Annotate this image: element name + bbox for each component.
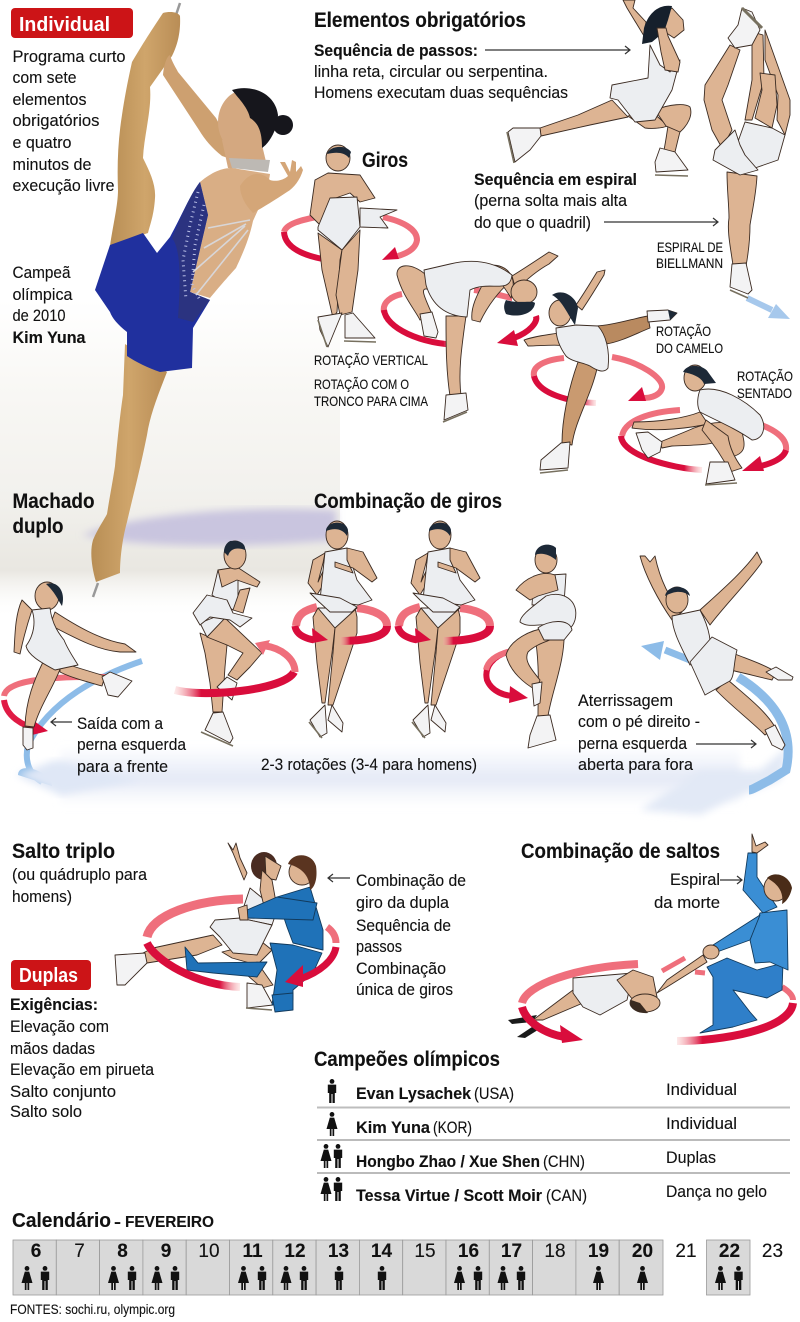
heading: machado duplo xyxy=(12,490,94,538)
calendar: 6 xyxy=(31,1241,41,1262)
figure: sit spin xyxy=(621,365,786,485)
text: combinação de giro da dupla: única de giros xyxy=(356,980,453,999)
label: rotação tronco: TRONCO PARA CIMA xyxy=(314,393,429,409)
arrow: espiral da morte xyxy=(720,876,742,884)
row: Zhao and Shen xyxy=(320,1144,716,1171)
figure: vertical spin xyxy=(284,145,417,347)
text: campeã olímpica: olímpica xyxy=(12,285,73,304)
text: combinação de giro da dupla: giro da dupla xyxy=(356,893,450,912)
calendar: 16 xyxy=(458,1241,479,1262)
calendar: 15 xyxy=(414,1241,436,1262)
calendar xyxy=(13,1240,783,1295)
text: aterrissagem: Aterrissagem xyxy=(578,691,673,710)
text: campeã olímpica xyxy=(12,263,86,347)
row: Kim Yuna: Kim Yuna xyxy=(356,1118,431,1137)
label: rotação sentado xyxy=(737,368,793,401)
label: rotações: 2-3 rotações (3-4 para homens) xyxy=(261,755,477,774)
text: sequência de passos xyxy=(314,41,568,102)
arrow: espiral xyxy=(604,218,718,226)
row: Zhao and Shen: (CHN) xyxy=(543,1152,585,1171)
text: combinação de giro da dupla: Combinação de xyxy=(356,871,466,890)
text: salto triplo: Salto triplo xyxy=(12,840,115,863)
arrow: passos xyxy=(485,46,630,54)
row: Virtue and Moir xyxy=(320,1177,767,1205)
text: aterrissagem: perna esquerda xyxy=(578,734,687,753)
text: espiral da morte: da morte xyxy=(654,893,720,912)
row: Virtue and Moir: Dança no gelo xyxy=(666,1182,767,1201)
photo: Kim Yuna skater xyxy=(91,3,303,597)
figure: axel take-off skater xyxy=(4,582,142,795)
duplas badge xyxy=(11,960,91,990)
text: combinação de giro da dupla: Sequência de xyxy=(356,916,451,935)
text: exigências: Exigências: xyxy=(10,995,98,1014)
calendar: 22 xyxy=(719,1241,740,1262)
ice band at the base of the jumps xyxy=(60,745,740,807)
heading: combinação de giros: Combinação de giros xyxy=(314,490,502,513)
text: programa curto: Programa curto xyxy=(12,47,126,66)
text: exigências: Elevação em pirueta xyxy=(10,1060,154,1079)
label: rotação tronco xyxy=(314,376,429,409)
table: champions xyxy=(317,1079,790,1205)
duplas badge: Duplas xyxy=(19,965,78,987)
text: salto triplo xyxy=(12,840,148,906)
label: rotação tronco: ROTAÇÃO COM O xyxy=(314,376,409,392)
text: exigências: Salto conjunto xyxy=(10,1082,116,1101)
calendar: 9 xyxy=(161,1241,171,1262)
text: saída: perna esquerda xyxy=(77,735,186,754)
row: Evan Lysachek: Evan Lysachek xyxy=(356,1084,472,1103)
label: rotação do camelo xyxy=(656,323,723,356)
figure: step sequence skater xyxy=(507,0,691,176)
heading: giros: Giros xyxy=(362,149,408,172)
heading: campeões olímpicos: Campeões olímpicos xyxy=(314,1048,500,1071)
arrow: combinação xyxy=(328,874,350,882)
text: aterrissagem xyxy=(578,691,700,774)
heading: calendário: - xyxy=(114,1214,121,1231)
text: sequência de passos: Sequência de passos: xyxy=(314,41,478,60)
row: Zhao and Shen: Hongbo Zhao / Xue Shen xyxy=(356,1152,540,1171)
text: campeã olímpica: Kim Yuna xyxy=(12,328,86,347)
text: espiral da morte: Espiral xyxy=(670,870,720,889)
row: Kim Yuna xyxy=(326,1112,737,1137)
label: espiral de Biellmann xyxy=(656,239,723,271)
text: sequência de passos: linha reta, circular ou serpentina. xyxy=(314,62,548,81)
heading: calendário: Calendário xyxy=(12,1210,111,1232)
text: programa curto: execução livre xyxy=(12,176,114,195)
text: aterrissagem: aberta para fora xyxy=(578,755,694,774)
text: exigências: mãos dadas xyxy=(10,1039,95,1058)
row: Evan Lysachek: (USA) xyxy=(474,1084,514,1103)
label: rotação do camelo: DO CAMELO xyxy=(656,340,723,356)
calendar: 13 xyxy=(328,1241,349,1262)
text: campeã olímpica: Campeã xyxy=(12,263,71,282)
label: rotação do camelo: ROTAÇÃO xyxy=(656,323,711,339)
text: salto triplo: homens) xyxy=(12,887,72,906)
heading: sequência em espiral: Sequência em espiral xyxy=(474,170,637,189)
figure: Biellmann spiral xyxy=(704,8,790,319)
text: espiral da morte xyxy=(654,870,720,912)
calendar: 23 xyxy=(762,1241,783,1262)
heading: sequência em espiral xyxy=(474,170,637,232)
heading: calendário xyxy=(12,1210,214,1232)
heading: calendário: FEVEREIRO xyxy=(125,1214,214,1231)
figure: axel landing skater xyxy=(640,552,793,815)
calendar: 11 xyxy=(242,1241,263,1262)
individual badge: Individual xyxy=(19,14,110,36)
calendar: 21 xyxy=(675,1241,697,1262)
label: espiral de Biellmann: BIELLMANN xyxy=(656,255,723,271)
figure: pair spin xyxy=(115,843,336,1012)
text: combinação de giro da dupla: Combinação xyxy=(356,959,446,978)
calendar: 8 xyxy=(117,1241,128,1262)
calendar: 18 xyxy=(544,1241,566,1262)
row: Evan Lysachek xyxy=(328,1079,737,1103)
text: exigências: Elevação com xyxy=(10,1017,109,1036)
ice photo background xyxy=(0,300,340,618)
figure: combination spin 3 xyxy=(398,521,490,738)
row: Kim Yuna: (KOR) xyxy=(433,1118,472,1137)
row: Virtue and Moir: Tessa Virtue / Scott Moir xyxy=(356,1186,542,1205)
text: programa curto: obrigatórios xyxy=(12,111,100,130)
heading: machado duplo: duplo xyxy=(12,515,64,538)
arrow: saída xyxy=(51,718,72,726)
text: campeã olímpica: de 2010 xyxy=(12,306,66,325)
heading: elementos obrigatórios: Elementos obrigatórios xyxy=(314,9,526,32)
label: rotação vertical: ROTAÇÃO VERTICAL xyxy=(314,352,428,368)
figure: combination spin 2 xyxy=(295,521,387,738)
row: Kim Yuna: Individual xyxy=(666,1114,737,1133)
figure: camel spin xyxy=(524,270,677,473)
row: Virtue and Moir: (CAN) xyxy=(546,1186,587,1205)
individual badge xyxy=(11,8,133,38)
calendar: 12 xyxy=(284,1241,306,1262)
heading: sequência em espiral: do que o quadril) xyxy=(474,213,591,232)
figure: combination spin 1 xyxy=(175,541,295,746)
text: combinação de giro da dupla: passos xyxy=(356,937,402,956)
sources: FONTES: sochi.ru, olympic.org xyxy=(10,1301,175,1317)
figure: combination spin 4 xyxy=(486,545,576,748)
text: salto triplo: (ou quádruplo para xyxy=(12,865,148,884)
heading: combinação de saltos: Combinação de saltos xyxy=(521,840,720,863)
text: saída xyxy=(77,714,186,776)
text: programa curto: minutos de xyxy=(12,155,92,174)
calendar: 7 xyxy=(74,1241,85,1262)
text: programa curto: com sete xyxy=(12,68,76,87)
text: combinação de giro da dupla xyxy=(356,871,466,999)
row: Zhao and Shen: Duplas xyxy=(666,1148,716,1167)
label: espiral de Biellmann: ESPIRAL DE xyxy=(657,239,723,255)
text: exigências xyxy=(10,995,154,1121)
text: exigências: Salto solo xyxy=(10,1102,82,1121)
row: Evan Lysachek: Individual xyxy=(666,1080,737,1099)
text: aterrissagem: com o pé direito - xyxy=(578,712,700,731)
calendar: 14 xyxy=(371,1241,392,1262)
text: programa curto: e quatro xyxy=(12,133,72,152)
text: sequência de passos: Homens executam duas sequências xyxy=(314,83,568,102)
heading: machado duplo: Machado xyxy=(12,490,94,513)
text: saída: para a frente xyxy=(77,757,168,776)
calendar: 17 xyxy=(501,1241,522,1262)
calendar: 19 xyxy=(588,1241,609,1262)
arrow: aterrissagem xyxy=(696,740,756,748)
text: programa curto: elementos xyxy=(12,90,86,109)
figure: death spiral xyxy=(508,834,793,1043)
figure: layback spin xyxy=(384,252,558,422)
heading: sequência em espiral: (perna solta mais alta xyxy=(474,191,628,210)
calendar: 10 xyxy=(198,1241,220,1262)
text: programa curto xyxy=(12,47,126,195)
text: saída: Saída com a xyxy=(77,714,163,733)
calendar: 20 xyxy=(632,1241,653,1262)
